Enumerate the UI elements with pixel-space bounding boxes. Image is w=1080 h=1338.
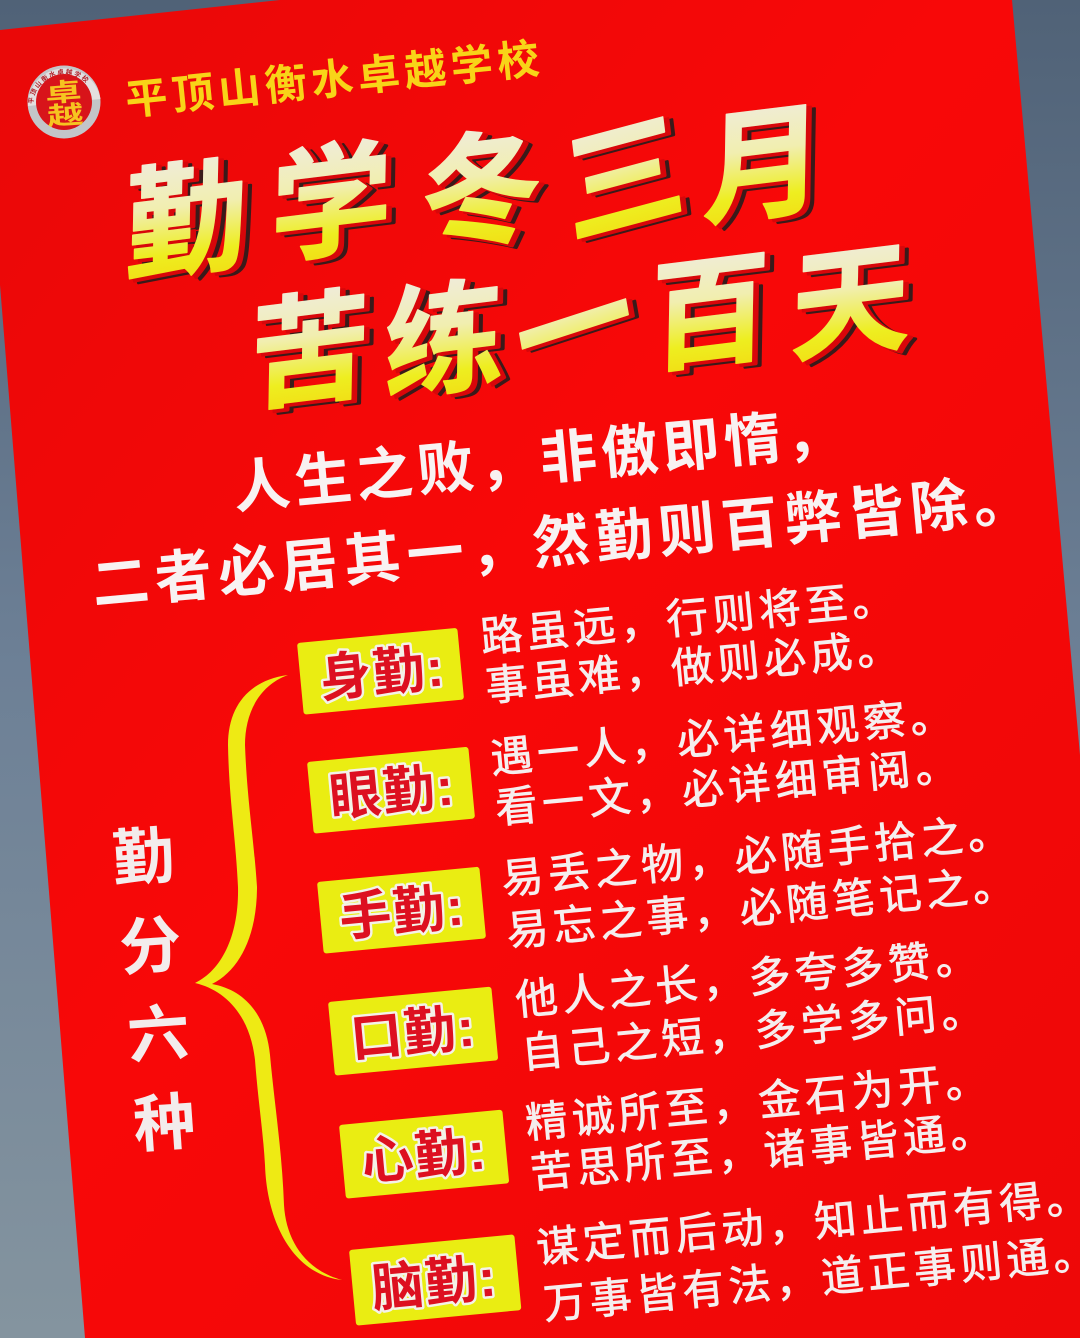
title line 2: 百	[658, 243, 780, 393]
row: 心勤: 苦思所至，诸事皆通。	[528, 1106, 999, 1197]
title line 2: 天	[790, 229, 911, 379]
title line 1: 冬	[420, 116, 543, 268]
title line 2: 苦	[258, 281, 380, 431]
title line 1: 学	[270, 128, 393, 280]
title line 2: 一	[506, 244, 644, 415]
title line 2: 练	[384, 267, 505, 417]
row: 身勤: 事虽难，做则必成。	[483, 624, 905, 710]
title line 1: 学	[278, 132, 402, 284]
row: 心勤: 心勤:	[359, 1122, 490, 1192]
row: 手勤: 易丢之物，必随手拾之。	[499, 808, 1016, 903]
row: 眼勤	[307, 691, 964, 834]
title line 1: 三	[556, 95, 691, 263]
row: 眼勤: 眼勤:	[327, 758, 458, 828]
row: 口勤: 他人之长，多夸多赞。	[513, 933, 984, 1024]
title line 1: 月	[710, 94, 834, 246]
title line 2: 练	[388, 269, 510, 420]
vertical label: 六	[125, 999, 192, 1072]
title line 2: 苦	[250, 277, 371, 427]
school logo: 越	[46, 100, 84, 131]
title line 2	[249, 228, 920, 432]
row: 手勤	[317, 808, 1021, 955]
title line 2: 百	[654, 241, 776, 392]
title line 2: 一	[511, 245, 649, 416]
row: 心勤: 精诚所至，金石为开。	[523, 1056, 994, 1147]
vertical label: 种	[131, 1088, 198, 1161]
row: 口勤	[328, 933, 990, 1077]
title line 1: 勤	[133, 150, 257, 302]
row: 脑勤	[349, 1173, 1080, 1328]
title line 1: 勤	[129, 148, 253, 301]
title line 1: 月	[706, 92, 830, 245]
title line 2: 一	[515, 246, 653, 417]
title line 1: 三	[562, 96, 696, 265]
title line 1: 月	[702, 90, 825, 242]
row: 手勤: 手勤:	[337, 878, 468, 948]
row: 眼勤: 看一文，必详细审阅。	[493, 741, 964, 832]
title line 1: 学	[274, 130, 398, 283]
row: 眼勤: 遇一人，必详细观察。	[488, 691, 959, 782]
quote line 2: 二者必居其一，然勤则百弊皆除。	[89, 467, 1039, 618]
school logo: 平顶山衡水卓越学校	[28, 68, 89, 104]
title line 2: 天	[794, 231, 916, 382]
school logo	[28, 66, 100, 138]
school name: 平顶山衡水卓越学校	[123, 35, 546, 124]
row: 身勤: 身勤:	[317, 639, 448, 709]
row: 脑勤: 谋定而后动，知止而有得。	[534, 1173, 1080, 1272]
title line 2: 百	[650, 239, 771, 389]
vertical label	[110, 822, 198, 1161]
row: 口勤: 自己之短，多学多问。	[519, 986, 990, 1077]
title line 1: 勤	[125, 146, 248, 298]
quote line 1: 人生之败，非傲即惰，	[230, 400, 850, 521]
title line 2: 天	[798, 233, 920, 383]
row: 身勤: 路虽远，行则将至。	[478, 575, 900, 661]
row: 心勤	[339, 1056, 999, 1199]
row: 身勤	[297, 575, 905, 715]
row: 手勤: 易忘之事，必随笔记之。	[504, 860, 1021, 955]
vertical label: 勤	[110, 822, 177, 895]
row: 口勤: 口勤:	[348, 999, 479, 1069]
title line 1: 冬	[424, 118, 548, 271]
vertical label: 分	[117, 911, 184, 984]
curly brace	[195, 675, 342, 1280]
title line 2: 苦	[254, 279, 376, 430]
row: 脑勤: 脑勤:	[369, 1249, 500, 1319]
school logo: 卓	[44, 77, 82, 108]
title line 1: 三	[566, 97, 700, 266]
title line 1: 冬	[428, 120, 552, 272]
title line 1	[124, 89, 834, 303]
title line 2: 练	[392, 271, 514, 421]
